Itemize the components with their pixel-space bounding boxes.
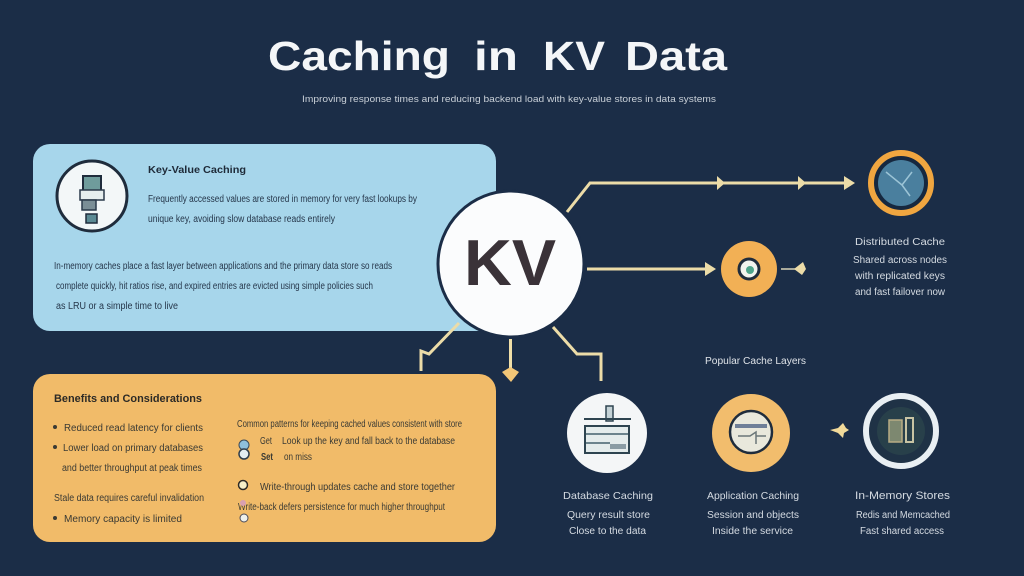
left list: Memory capacity is limited: [64, 514, 182, 525]
label: memory: In-Memory Stores: [855, 490, 951, 502]
intro text: Frequently accessed values are stored in memory for very fast lookups by: [148, 194, 417, 205]
panel heading: Benefits and Considerations: [54, 393, 202, 405]
title: Caching: [268, 33, 450, 79]
icon: application layer: [712, 394, 790, 472]
small arrow: [781, 262, 806, 275]
panel heading: Key-Value Caching: [148, 164, 246, 176]
title: Data: [625, 33, 728, 79]
text block: top right: Shared across nodes: [853, 255, 947, 266]
body text: as LRU or a simple time to live: [56, 301, 178, 312]
label: memory: Fast shared access: [860, 526, 944, 537]
right list: Common patterns for keeping cached values consistent with store: [237, 419, 462, 430]
icon: globe node: [871, 153, 931, 213]
left list: Reduced read latency for clients: [64, 423, 203, 434]
arrow: down to panel: [502, 339, 519, 382]
icon: orange node: [721, 241, 777, 297]
icon: write through: [238, 480, 248, 490]
body text: [54, 261, 392, 312]
connector: top route: [567, 176, 855, 212]
text block: top right: and fast failover now: [855, 287, 946, 298]
body text: complete quickly, hit ratios rise, and expired entries are evicted using simple policies such: [56, 281, 373, 292]
small arrow: star: [830, 423, 849, 438]
label: database: [563, 490, 653, 537]
text block: top right: [853, 237, 947, 298]
text block: top right: Distributed Cache: [855, 237, 945, 248]
left list: Lower load on primary databases: [63, 443, 203, 454]
label: memory: Redis and Memcached: [856, 510, 950, 521]
panel: strategies: [33, 374, 496, 542]
icon: server stack: [57, 161, 127, 231]
right list: on miss: [284, 452, 312, 463]
label: application: [707, 490, 799, 537]
right list: Write-back defers persistence for much higher throughput: [238, 502, 445, 513]
label: database: Close to the data: [569, 526, 646, 537]
left list: and better throughput at peak times: [62, 463, 202, 474]
title: KV: [543, 33, 606, 79]
icon: memory chip: [866, 396, 936, 466]
heading: cache layers: Popular Cache Layers: [705, 356, 806, 367]
right list: Look up the key and fall back to the database: [282, 436, 455, 447]
title: [268, 33, 728, 79]
right list: [237, 419, 462, 513]
body text: In-memory caches place a fast layer between applications and the primary data store so reads: [54, 261, 392, 272]
central KV circle: [438, 191, 584, 337]
connector: to orange panel: [421, 323, 459, 371]
label: database: Query result store: [567, 510, 650, 521]
connector: to lower icons: [553, 327, 601, 381]
text block: top right: with replicated keys: [854, 271, 945, 282]
left list: [53, 423, 204, 525]
title: in: [474, 33, 518, 79]
icon: write back: [240, 500, 248, 522]
label: application: Session and objects: [707, 510, 799, 521]
right list: Get: [260, 436, 272, 447]
connector: middle route: [587, 262, 716, 276]
label: application: Application Caching: [707, 490, 799, 502]
label: database: Database Caching: [563, 490, 653, 502]
intro text: unique key, avoiding slow database reads entirely: [148, 214, 335, 225]
right list: Set: [261, 452, 274, 463]
panel: what is caching: [33, 144, 496, 331]
right list: Write-through updates cache and store together: [260, 482, 456, 493]
left list: Stale data requires careful invalidation: [54, 493, 204, 504]
icon: get set: [239, 440, 249, 459]
label: application: Inside the service: [712, 526, 793, 537]
intro text: [148, 194, 417, 225]
KV label: KV: [464, 226, 556, 299]
subtitle: Improving response times and reducing backend load with key-value stores in data systems: [302, 94, 716, 105]
label: memory: [855, 490, 951, 537]
icon: database: [567, 393, 647, 473]
